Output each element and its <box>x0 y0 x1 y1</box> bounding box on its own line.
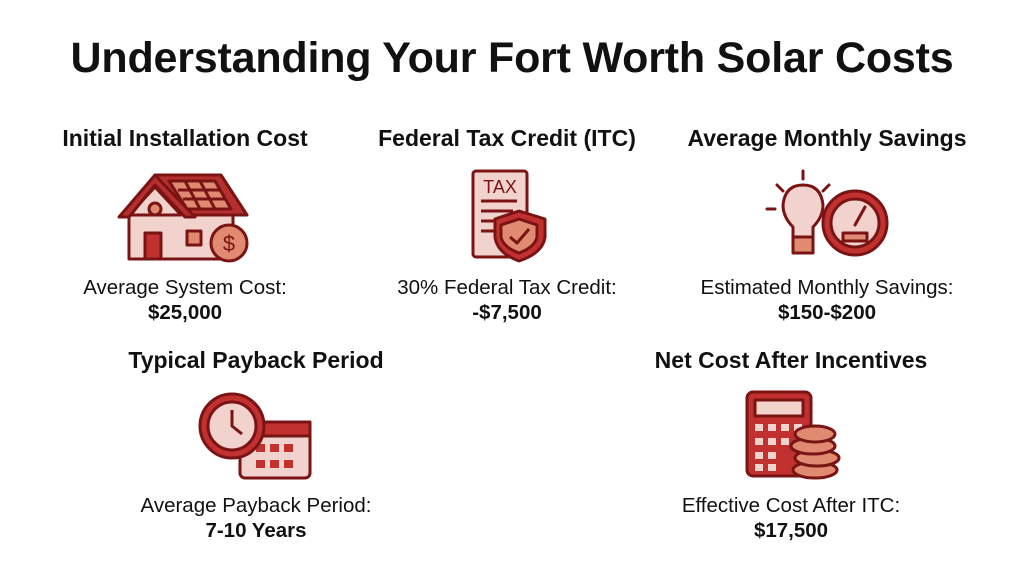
heading: Net Cost After Incentives <box>655 347 927 373</box>
heading: Initial Installation Cost <box>62 125 308 151</box>
heading: Typical Payback Period <box>128 347 384 373</box>
icon: bulb and gauge <box>766 170 888 256</box>
heading: Average Monthly Savings <box>687 125 967 151</box>
panel: payback period <box>128 347 384 542</box>
heading: Federal Tax Credit (ITC) <box>378 125 636 151</box>
label: Average Payback Period: <box>141 494 371 517</box>
panel: net cost <box>655 347 927 542</box>
icon: tax document with shield <box>472 170 546 262</box>
icon: tax document with shield: TAX <box>483 177 517 197</box>
value: $25,000 <box>148 301 222 324</box>
panel: monthly savings <box>687 125 967 324</box>
label: 30% Federal Tax Credit: <box>397 276 617 299</box>
icon: house with solar and dollar <box>118 173 249 262</box>
title: Understanding Your Fort Worth Solar Costs <box>71 34 953 82</box>
panel: installation cost <box>62 125 308 324</box>
label: Average System Cost: <box>83 276 287 299</box>
icon: house with solar and dollar: $ <box>223 231 235 256</box>
icon: clock and calendar <box>198 392 312 480</box>
label: Estimated Monthly Savings: <box>701 276 953 299</box>
value: 7-10 Years <box>205 519 307 542</box>
panel: tax credit <box>378 125 636 324</box>
icon: calculator and coins <box>746 390 840 480</box>
value: $150-$200 <box>778 301 876 324</box>
value: $17,500 <box>754 519 828 542</box>
value: -$7,500 <box>472 301 542 324</box>
label: Effective Cost After ITC: <box>682 494 900 517</box>
